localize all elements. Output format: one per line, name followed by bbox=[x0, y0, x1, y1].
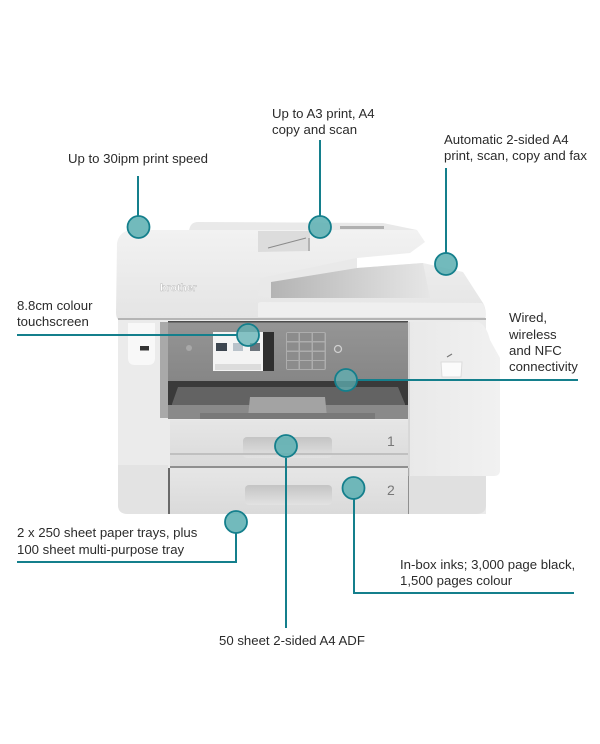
callout: print speed bbox=[68, 151, 208, 238]
callout: inks: 1,500 pages colour bbox=[400, 573, 513, 588]
callout: inks: In-box inks; 3,000 page black, bbox=[400, 557, 575, 572]
control panel bbox=[168, 321, 408, 382]
printer base body bbox=[118, 320, 486, 514]
tray 2 bbox=[168, 466, 409, 514]
callout: inks bbox=[342, 477, 575, 593]
callout: 2-sided: Automatic 2-sided A4 bbox=[444, 132, 569, 147]
left shadow column bbox=[160, 322, 169, 418]
callout: ADF: 50 sheet 2-sided A4 ADF bbox=[219, 633, 365, 648]
callout: connectivity: wireless bbox=[508, 327, 557, 342]
callout: A3 print bbox=[272, 106, 375, 238]
output tray slot bbox=[258, 258, 357, 298]
callout: A3 print: copy and scan bbox=[272, 122, 357, 137]
tray 1 bbox=[170, 420, 408, 466]
callout: A3 print: Up to A3 print, A4 bbox=[272, 106, 375, 121]
tray 1: 1 bbox=[387, 433, 395, 449]
callout: connectivity: connectivity bbox=[509, 359, 578, 374]
callout: print speed: Up to 30ipm print speed bbox=[68, 151, 208, 166]
callout: touchscreen: touchscreen bbox=[17, 314, 89, 329]
touchscreen bbox=[213, 332, 263, 371]
callout: touchscreen: 8.8cm colour bbox=[17, 298, 93, 313]
callout: connectivity: Wired, bbox=[509, 310, 547, 325]
ink tank bbox=[409, 322, 500, 476]
printer illustration bbox=[116, 222, 500, 514]
paper output opening bbox=[168, 381, 408, 419]
brother logo: brother bbox=[160, 282, 197, 294]
callout: connectivity bbox=[335, 310, 578, 391]
tray 2: 2 bbox=[387, 482, 395, 498]
callout: connectivity: and NFC bbox=[509, 343, 562, 358]
callout: 2-sided: print, scan, copy and fax bbox=[444, 148, 587, 163]
usb cover bbox=[128, 323, 155, 365]
document feeder top bbox=[189, 222, 417, 240]
callout: ADF bbox=[219, 435, 365, 648]
input tray recess bbox=[258, 231, 310, 252]
callout: touchscreen bbox=[17, 298, 259, 346]
scanner lid bbox=[116, 230, 486, 320]
callout: paper trays: 2 x 250 sheet paper trays, plus bbox=[17, 525, 198, 540]
callout: paper trays bbox=[17, 511, 247, 562]
callout: 2-sided bbox=[435, 132, 587, 275]
keypad bbox=[286, 332, 326, 370]
callout: paper trays: 100 sheet multi-purpose tray bbox=[17, 542, 185, 557]
